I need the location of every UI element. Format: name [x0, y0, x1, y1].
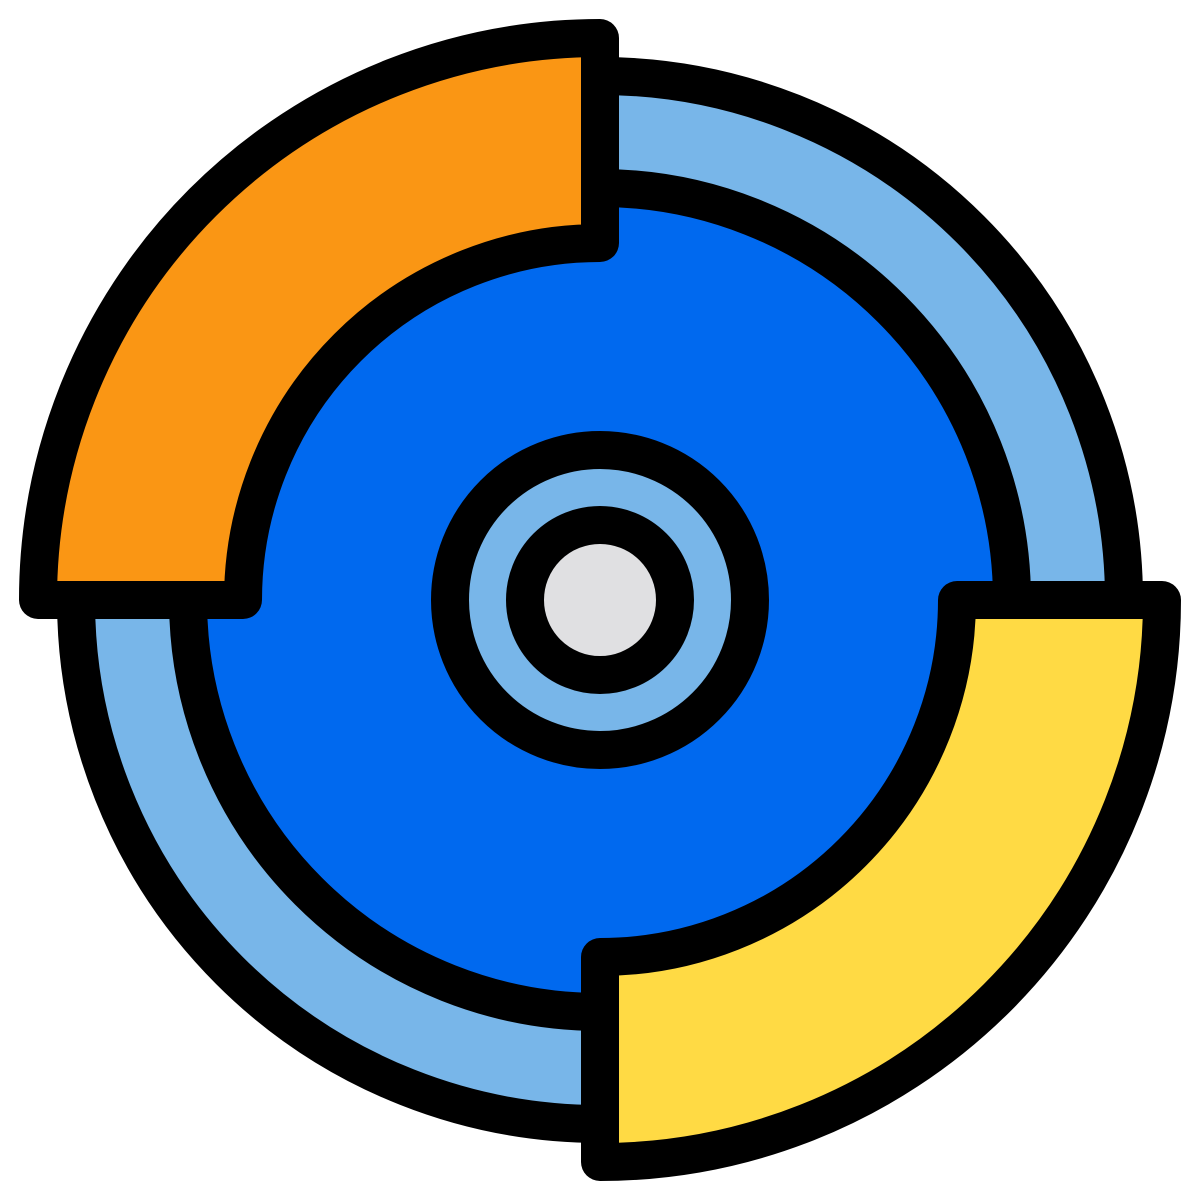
center grey dot	[525, 525, 675, 675]
inner blue disc	[188, 188, 1012, 1012]
outer light blue ring	[76, 76, 1124, 1124]
orange segment top-left	[38, 38, 600, 600]
center light blue ring	[450, 450, 750, 750]
yellow segment bottom-right	[600, 600, 1162, 1162]
